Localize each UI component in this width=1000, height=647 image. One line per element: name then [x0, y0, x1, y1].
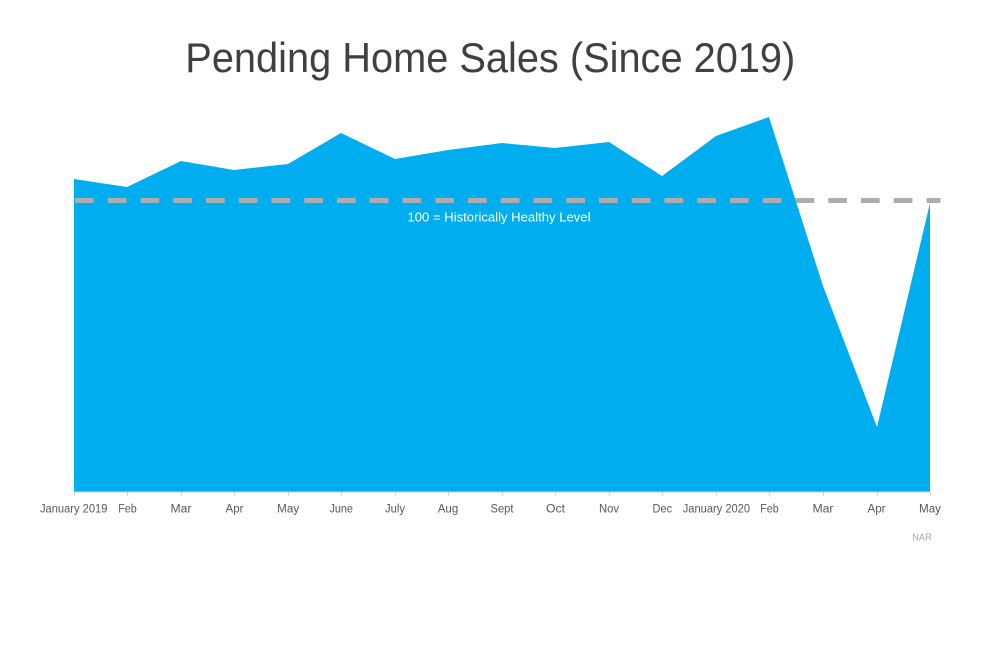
x axis labels: Sept [490, 504, 514, 516]
x axis labels: May [919, 504, 941, 516]
x axis labels: January 2020 [683, 504, 750, 516]
x axis labels: Feb [760, 504, 779, 516]
x axis labels: Mar [812, 504, 834, 516]
x axis labels: Apr [226, 504, 244, 516]
x axis labels: Oct [546, 504, 566, 516]
x axis labels: Mar [170, 504, 192, 516]
x axis [74, 492, 930, 496]
x axis labels [40, 504, 941, 516]
x axis labels: July [385, 504, 405, 516]
x axis labels: Nov [599, 504, 619, 516]
area chart [74, 117, 930, 492]
title: Pending Home Sales (Since 2019) [185, 34, 795, 81]
x axis labels: Feb [118, 504, 137, 516]
reference line: 100 level [75, 198, 940, 203]
x axis labels: June [329, 504, 353, 516]
source: NAR [912, 532, 932, 544]
x axis labels: May [277, 504, 299, 516]
x axis labels: Aug [438, 504, 458, 516]
x axis labels: Dec [653, 504, 672, 516]
reference line label: 100 = Historically Healthy Level [408, 210, 591, 224]
x axis labels: Apr [868, 504, 886, 516]
x axis labels: January 2019 [40, 504, 107, 516]
